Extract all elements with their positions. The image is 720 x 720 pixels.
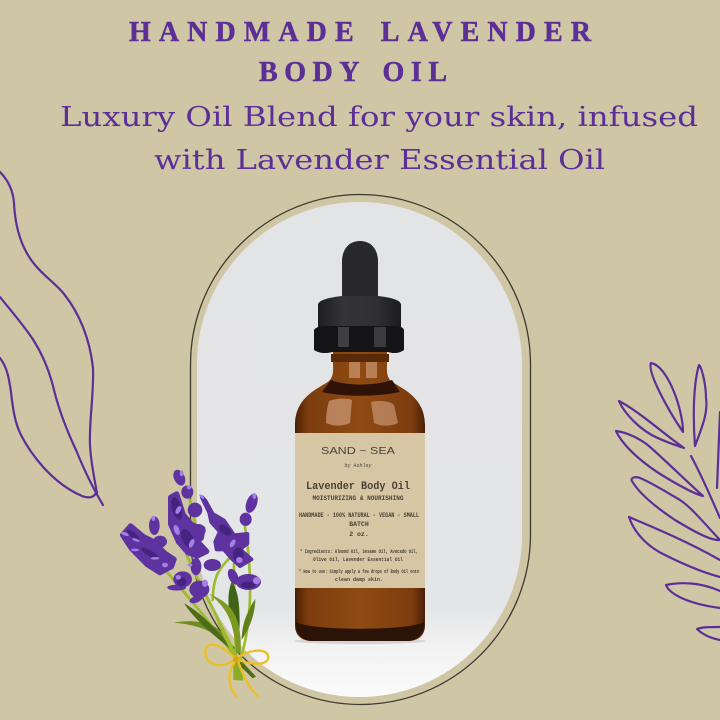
kraft label: clean damp skin.: [335, 577, 383, 583]
bottle shadow: [294, 638, 426, 644]
title: HANDMADE LAVENDER: [129, 17, 592, 48]
decorative leaf: right: [616, 363, 720, 640]
product bottle: [294, 241, 426, 644]
title: BODY OIL: [259, 57, 447, 88]
kraft label: 2 oz.: [349, 531, 369, 538]
dropper bulb: [342, 241, 378, 297]
decorative leaf: left: [0, 172, 103, 505]
kraft label: by Ashley: [344, 463, 372, 469]
oval photo frame: [190, 194, 530, 704]
kraft label: MOISTURIZING & NOURISHING: [312, 495, 404, 502]
lavender bouquet illustration: [121, 468, 268, 697]
ribbed cap: [318, 296, 401, 328]
kraft label: Olive Oil, Lavender Essential Oil: [313, 557, 403, 563]
kraft label: HANDMADE - 100% NATURAL - VEGAN - SMALL: [299, 512, 419, 519]
kraft label: * Ingredients: Almond Oil, Sesame Oil, Avocado Oil,: [300, 549, 418, 555]
kraft label: [295, 433, 425, 588]
kraft label: Lavender Body Oil: [306, 481, 410, 493]
subtitle: [60, 101, 698, 176]
subtitle: with Lavender Essential Oil: [154, 144, 605, 176]
subtitle: Luxury Oil Blend for your skin, infused: [60, 101, 698, 133]
kraft label: * How to use: Simply apply a few drops of Body Oil onto: [299, 569, 419, 575]
glass highlights: [326, 399, 352, 426]
glossy collar: [314, 326, 404, 353]
dark flower shading: [125, 496, 256, 588]
ribbon knot: [233, 656, 239, 662]
kraft label: BATCH: [349, 521, 369, 528]
flower spikes: [123, 468, 261, 605]
glass body: [295, 352, 425, 641]
title: [129, 17, 592, 88]
yellow ribbon bow: [205, 645, 268, 697]
flower highlights: [121, 470, 260, 587]
kraft label: SAND ~ SEA: [321, 445, 395, 457]
leaves: [173, 582, 256, 681]
stems: [167, 500, 250, 659]
